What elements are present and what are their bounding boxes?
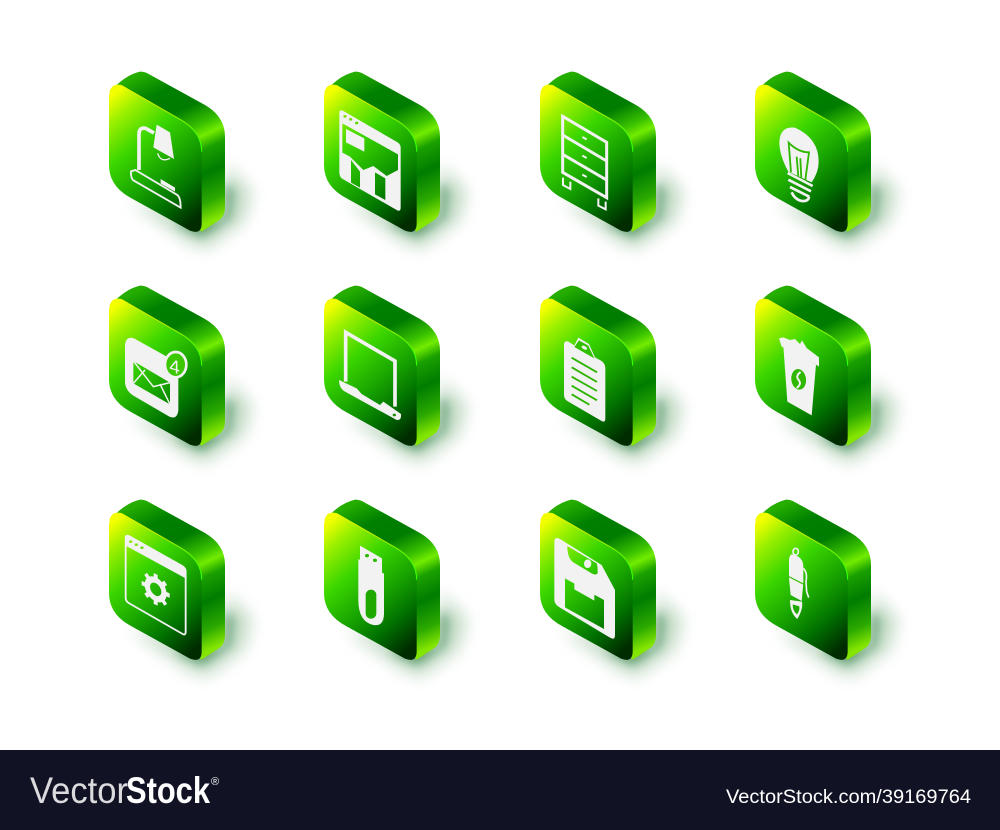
icon: clipboard — [564, 338, 605, 422]
logo: VectorStock: Stock — [126, 770, 210, 811]
tile: usb flash drive — [324, 500, 467, 676]
tile: chest of drawers — [540, 72, 683, 248]
icon: usb flash drive — [358, 547, 384, 625]
logo: VectorStock: Vector — [30, 770, 128, 811]
icon: browser chart window — [339, 110, 401, 211]
tile: fountain pen — [755, 500, 898, 676]
watermark bar — [0, 750, 1000, 830]
logo: VectorStock: ® — [211, 776, 219, 788]
icon: desk lamp — [131, 125, 181, 208]
tile: laptop — [324, 286, 467, 462]
icon: mail with notification — [125, 338, 186, 417]
tile: light bulb — [755, 72, 898, 248]
logo: VectorStock — [30, 770, 219, 811]
tile: clipboard — [540, 286, 683, 462]
icon: mail with notification: 4 — [169, 356, 180, 379]
icon: window settings — [126, 536, 186, 634]
tile: window settings — [109, 500, 252, 676]
icon: fountain pen — [789, 548, 809, 619]
tile: floppy disk — [540, 500, 683, 676]
icon: coffee cup — [779, 337, 819, 415]
tile: mail with notification — [109, 286, 252, 462]
tile: desk lamp — [109, 72, 252, 248]
image id: VectorStock.com/39169764 — [726, 787, 971, 808]
icon: floppy disk — [554, 538, 615, 639]
tile: coffee cup — [755, 286, 898, 462]
icon: chest of drawers — [563, 116, 607, 209]
tile: browser chart window — [324, 72, 467, 248]
icon: laptop — [339, 332, 401, 420]
icon: light bulb — [779, 127, 819, 201]
